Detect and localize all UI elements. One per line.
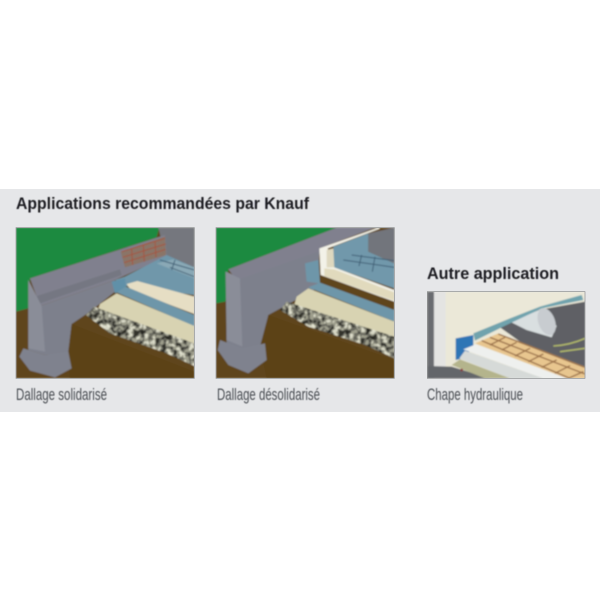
foundation stem: [225, 262, 320, 349]
back wall: [158, 228, 194, 268]
footing: [218, 340, 267, 373]
floor base: [427, 366, 490, 378]
illustration: dallage désolidarisé: [216, 228, 394, 378]
concrete slab: [293, 288, 394, 343]
illustration: dallage solidarisé: [16, 228, 194, 378]
title: Applications recommandées par Knauf: [16, 194, 309, 213]
floor layers: [115, 255, 194, 295]
illustration: chape hydraulique: [427, 292, 585, 378]
back wall: [368, 228, 394, 263]
foundation stem: [28, 280, 115, 355]
screed layers: [463, 344, 567, 378]
wall top with brick: [30, 235, 167, 306]
caption: dallage solidarisé: Dallage solidarisé: [16, 385, 107, 404]
caption: chape hydraulique: Chape hydraulique: [427, 385, 523, 404]
green lawn: [16, 228, 159, 312]
gravel layer: [86, 307, 194, 366]
caption: dallage désolidarisé: Dallage désolidarisé: [217, 385, 320, 404]
blue insulation: [305, 260, 320, 283]
soil: [68, 324, 194, 378]
heading: autre application: Autre application: [427, 264, 559, 283]
blue edge strip: [456, 335, 473, 360]
footing: [19, 348, 72, 377]
green lawn: [216, 228, 337, 303]
soil: [260, 315, 394, 378]
floor blue back: [333, 233, 394, 288]
wall section: [427, 292, 434, 378]
dark membrane and roll: [500, 301, 585, 368]
heating mesh: [475, 333, 585, 378]
white edge strip: [319, 228, 394, 302]
panel: background band: [0, 189, 600, 412]
wall top: [228, 228, 374, 279]
gravel layer: [280, 302, 394, 358]
